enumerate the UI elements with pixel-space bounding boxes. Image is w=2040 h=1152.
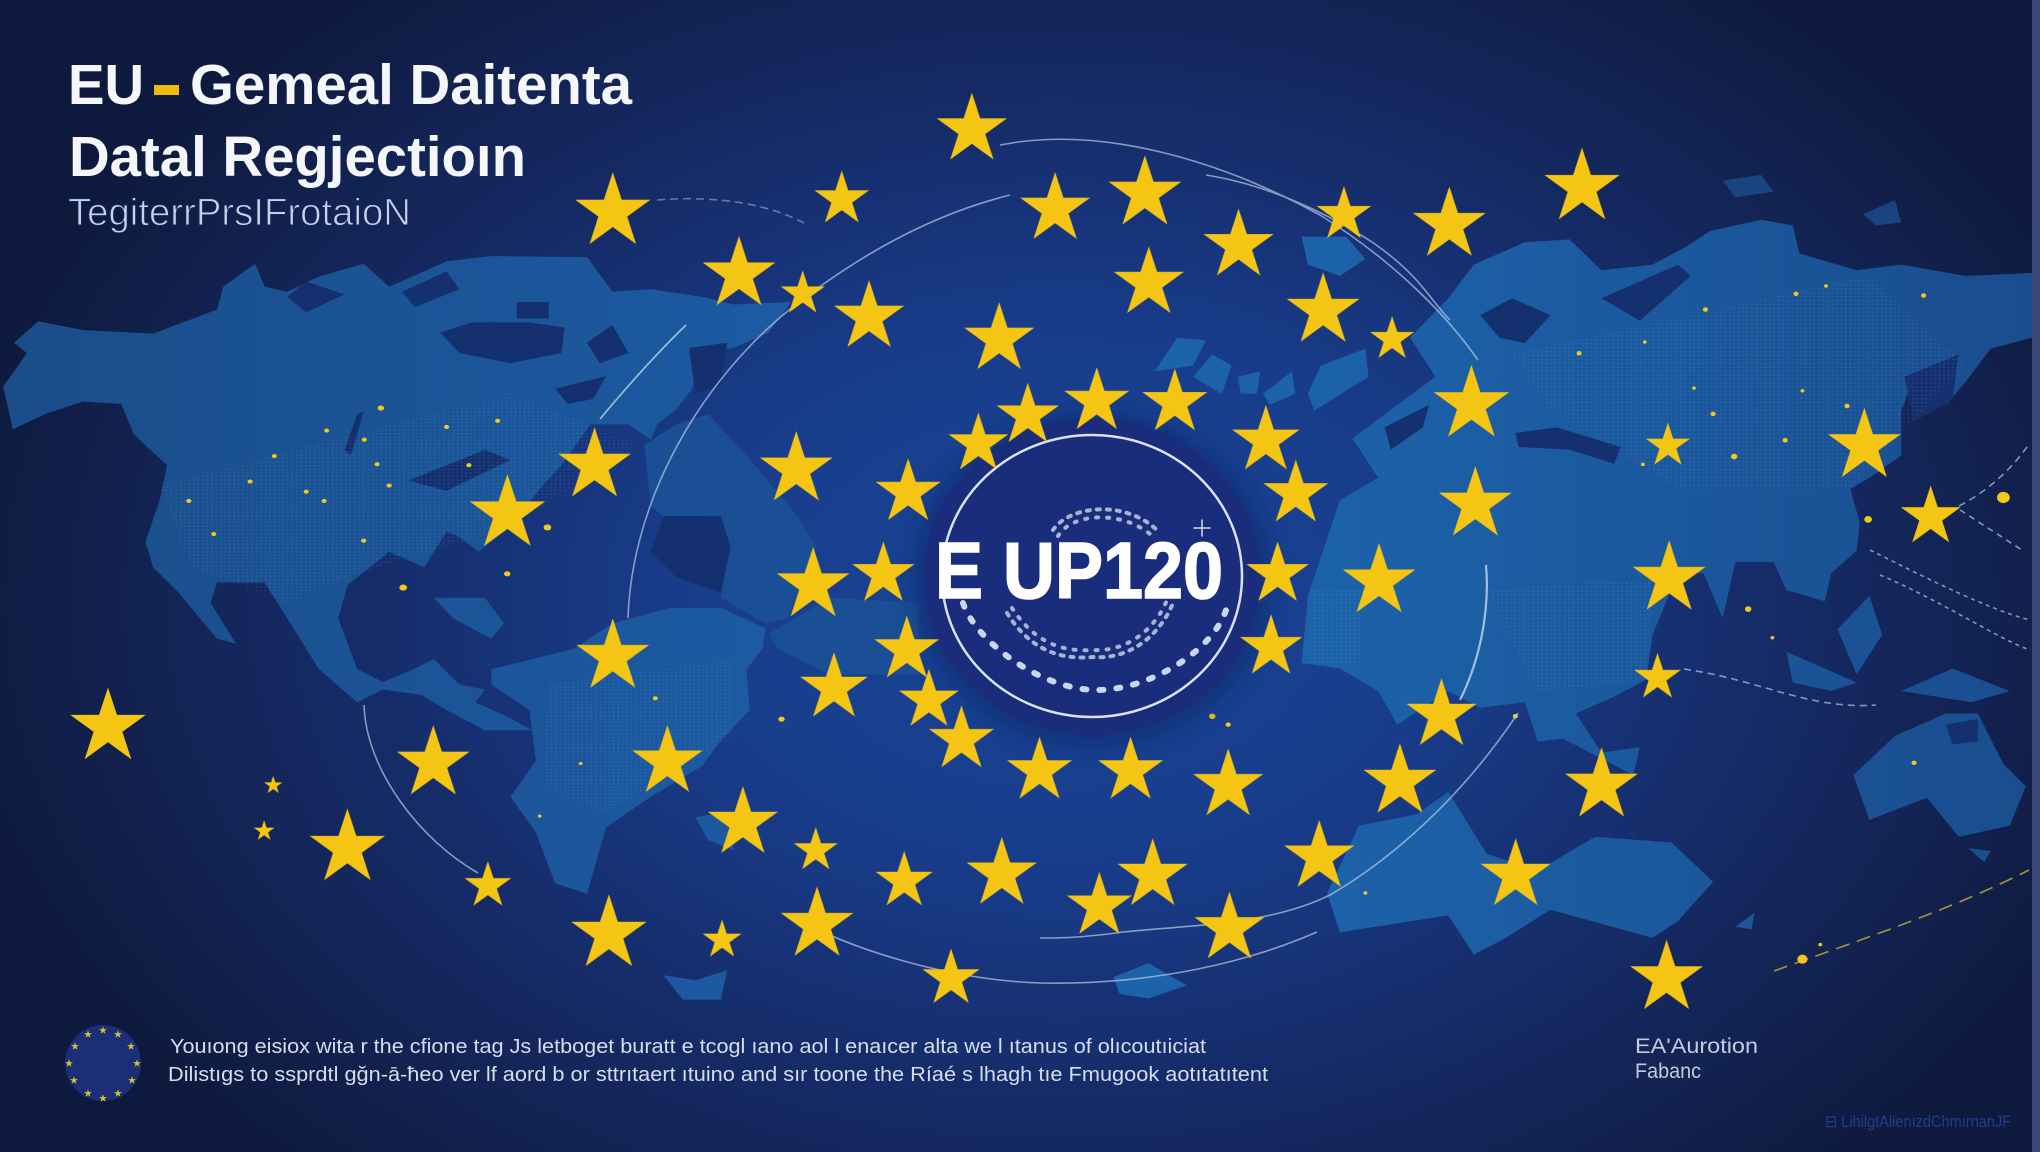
map: americas inland waters [287, 271, 731, 593]
title: Datal Regjectioın [69, 125, 526, 189]
central emblem [920, 418, 1264, 740]
footer description: Youıong eisiox wita r the cfione tag Js letboget buratt e tcogl ıano aol l enaıcer alta we l ıtanus of olıcoutıiciat [170, 1036, 1206, 1058]
city dots: americas [186, 406, 785, 818]
right edge strip [2032, 0, 2040, 1152]
orbit lines [364, 139, 2030, 983]
emblem disc [924, 418, 1260, 734]
world map [3, 175, 2032, 1000]
footer source label: Fabanc [1635, 1060, 1701, 1083]
title [68, 53, 633, 189]
title: EU [68, 53, 144, 117]
title: Gemeal Daitenta [190, 53, 633, 117]
map: americas [3, 256, 919, 1000]
emblem ring [942, 435, 1242, 717]
icon: EU star circle [65, 1025, 141, 1102]
subtitle: TegiterrPrsIFrotaioN [68, 192, 411, 234]
emblem label: E UP120 [935, 526, 1223, 615]
footer description [168, 1036, 1268, 1086]
emblem shadow [920, 420, 1264, 740]
footer source label [1635, 1035, 1758, 1083]
city dots: asia [1209, 284, 2010, 964]
footer source label: EA'Aurotion [1635, 1035, 1758, 1058]
map: eurasia inland waters [1385, 265, 1978, 744]
emblem dotted arcs [963, 509, 1227, 690]
footer description: Dilistıgs to ssprdtl gğn-ā-ħeo ver lf aord b or sttrıtaert ıtuino and sır toone the Ríaé s lhagh tıe Fmugook aotıtatıtent [168, 1064, 1268, 1086]
map dots [186, 284, 2010, 964]
title dash [154, 85, 179, 95]
gold stars [70, 93, 1961, 1009]
faint footer credit: ⊟ LihilgtAlienızdChmırnanJF [1825, 1112, 2011, 1131]
map: eurasia africa australia [1113, 175, 2032, 998]
